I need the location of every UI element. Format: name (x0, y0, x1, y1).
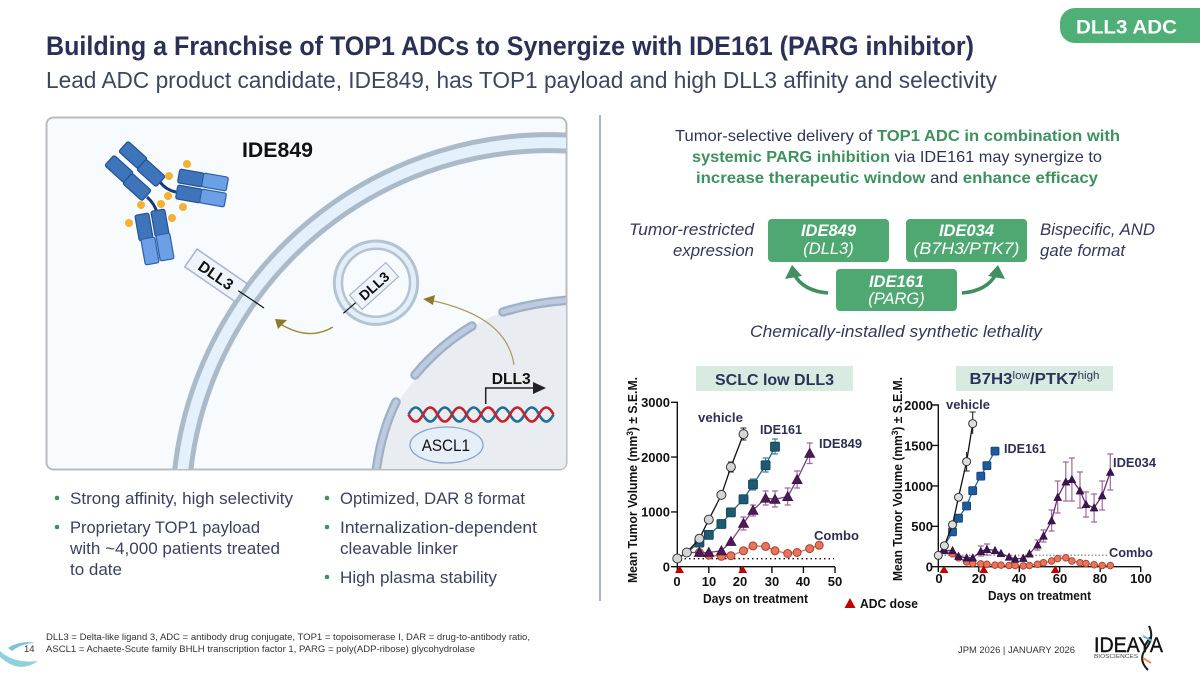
text block: delivery rationale (675, 128, 1120, 187)
bullet list: left column: Proprietary TOP1 payload (70, 518, 260, 537)
axes: 0 (673, 574, 681, 589)
tag: DLL3 ADC (1060, 8, 1200, 43)
series: IDE161 (687, 439, 780, 552)
bullet list: left column: Strong affinity, high selectivity (70, 489, 293, 508)
axes: 80 (1093, 571, 1107, 586)
axes: 50 (828, 574, 842, 589)
footer: event: JPM 2026 | JANUARY 2026 (958, 645, 1075, 656)
logo: IDEAYA Biosciences: BIOSCIENCES (1094, 654, 1139, 660)
box: IDE161 (836, 269, 957, 311)
dose markers (940, 566, 1060, 573)
chart heading: SCLC low DLL3 (715, 372, 834, 389)
series labels: vehicle (698, 410, 743, 425)
axes: 1000 (904, 479, 933, 494)
bullet list: right column: High plasma stability (340, 568, 497, 587)
footnote (46, 632, 530, 655)
axes: 20 (733, 574, 747, 589)
axes: 100 (1130, 571, 1152, 586)
chart: SCLC low DLL3 (625, 366, 862, 606)
series labels: IDE161 (760, 422, 802, 437)
chart: B7H3 low PTK7 high (890, 366, 1157, 603)
series: IDE849 (687, 443, 815, 556)
text block: delivery rationale: Tumor-selective delivery of TOP1 ADC in combination with (675, 128, 1120, 145)
subtitle: Lead ADC product candidate, IDE849, has TOP1 payload and high DLL3 affinity and selectivity (46, 67, 997, 93)
axes: 10 (702, 574, 716, 589)
label: tumor-restricted expression: expression (673, 242, 754, 260)
footnote: ASCL1 = Achaete-Scute family BHLH transcription factor 1, PARG = poly(ADP-ribose) glycohydrolase (46, 644, 475, 655)
series: vehicle (673, 428, 748, 563)
y axis title: Mean Tumor Volume (mm (625, 426, 640, 583)
arrow: IDE161 to IDE034 (962, 265, 1005, 293)
label: bispecific format: gate format (1040, 242, 1126, 260)
axes: 60 (1053, 571, 1067, 586)
series labels (946, 397, 1157, 560)
chart heading: high (1078, 370, 1100, 382)
label: bispecific format (1040, 221, 1155, 260)
chart heading (956, 366, 1113, 391)
axes: 1000 (641, 504, 670, 520)
series: vehicle (934, 412, 977, 559)
y axis title: 3 (625, 431, 635, 436)
vesicle with DLL3: DLL3 (356, 268, 393, 304)
series: combo (687, 541, 823, 560)
page number with swoosh (0, 642, 38, 667)
panel: IDE849 mechanism illustration (46, 118, 575, 475)
text block: delivery rationale: systemic PARG inhibition via IDE161 may synergize to (692, 149, 1102, 166)
axes: 0 (935, 571, 943, 586)
ASCL1 ellipse: ASCL1 (422, 436, 470, 455)
axes (641, 395, 842, 589)
label: IDE849: IDE849 (242, 139, 313, 162)
x axis title: Days on treatment (988, 589, 1092, 603)
y axis title: Mean Tumor Volume (mm (890, 424, 905, 581)
x axis title: Days on treatment (703, 592, 809, 606)
footnote: DLL3 = Delta-like ligand 3, ADC = antibody drug conjugate, TOP1 = topoisomerase I, DAR = drug-to-antibody ratio, (46, 632, 530, 643)
title: Building a Franchise of TOP1 ADCs to Synergize with IDE161 (PARG inhibitor) (46, 31, 974, 61)
legend: ADC dose: ADC dose (860, 597, 918, 611)
bullet list: right column (325, 489, 537, 587)
logo: IDEAYA Biosciences (1094, 626, 1164, 670)
series labels: Combo (1109, 545, 1153, 560)
axes: 3000 (641, 395, 670, 410)
bullet list: right column: cleavable linker (340, 539, 458, 558)
axes (904, 398, 1152, 586)
axes: 20 (972, 571, 986, 586)
bullet list: left column: to date (70, 560, 122, 579)
series labels: IDE161 (1004, 441, 1046, 456)
diagram: franchise boxes (629, 219, 1155, 341)
box: IDE034: (B7H3/PTK7) (914, 240, 1020, 258)
series: IDE034 (940, 454, 1114, 562)
page number with swoosh: 14 (24, 644, 35, 655)
logo: IDEAYA Biosciences: IDEAYA (1094, 633, 1164, 657)
y axis title: ) ± S.E.M. (625, 377, 640, 431)
box: IDE161: (PARG) (868, 290, 925, 308)
box: IDE034: IDE034 (939, 222, 994, 240)
bullet list: right column: Internalization-dependent (340, 518, 537, 537)
cell membrane (182, 143, 575, 475)
gene label and promoter arrow (486, 371, 546, 404)
tag: DLL3 ADC: DLL3 ADC (1076, 18, 1177, 38)
axes: 2000 (641, 450, 670, 465)
box: IDE849: IDE849 (801, 222, 857, 240)
box: IDE161: IDE161 (869, 273, 924, 291)
y axis title: ) ± S.E.M. (890, 377, 905, 431)
series: IDE161 (944, 447, 999, 546)
axes: 2000 (904, 398, 933, 413)
chart heading: low (1013, 370, 1030, 382)
axes: 0 (926, 560, 933, 574)
axes: 1500 (904, 438, 933, 454)
box: IDE849 (768, 219, 889, 262)
chart heading (696, 366, 853, 391)
chart heading: B7H3 (970, 371, 1010, 388)
bullet list: left column (55, 489, 293, 579)
text block: delivery rationale: increase therapeutic window and enhance efficacy (696, 170, 1098, 187)
dose markers (675, 566, 747, 573)
label: tumor-restricted expression: Tumor-restricted (629, 221, 755, 239)
chart heading: /PTK7 (1030, 371, 1078, 388)
nucleus (380, 302, 570, 470)
series labels (698, 410, 862, 543)
axes: 40 (796, 574, 810, 589)
arrow: nucleus to vesicle (423, 295, 514, 365)
label: bispecific format: Bispecific, AND (1040, 221, 1155, 239)
DLL3 receptor on membrane: DLL3 (195, 258, 237, 294)
arrow: IDE161 to IDE849 (785, 265, 828, 293)
nuclear envelope (376, 300, 572, 472)
antibody drug conjugate (105, 141, 229, 265)
label: tumor-restricted expression (629, 221, 755, 260)
axes: 40 (1012, 571, 1026, 586)
series labels: IDE034 (1113, 455, 1157, 470)
DNA helix (408, 408, 554, 422)
box: IDE849: (DLL3) (803, 240, 854, 258)
ASCL1 ellipse (410, 427, 483, 463)
series labels: IDE849 (819, 436, 862, 451)
axes: 0 (663, 560, 670, 574)
vesicle with DLL3 (334, 241, 418, 324)
axes: 500 (911, 519, 933, 534)
arrow: vesicle to membrane (275, 319, 333, 334)
bullet list: right column: Optimized, DAR 8 format (340, 489, 525, 508)
bullet list: left column: with ~4,000 patients treated (69, 539, 280, 558)
DLL3 receptor on membrane (185, 249, 264, 308)
gene label and promoter arrow: DLL3 (492, 371, 531, 388)
series labels: vehicle (946, 397, 990, 412)
series: combo (944, 550, 1114, 569)
y axis title: 3 (890, 431, 900, 435)
box: IDE034 (906, 219, 1027, 262)
series labels: Combo (814, 528, 859, 543)
axes: 30 (765, 574, 779, 589)
caption: synthetic lethality: Chemically-installed synthetic lethality (750, 323, 1044, 341)
